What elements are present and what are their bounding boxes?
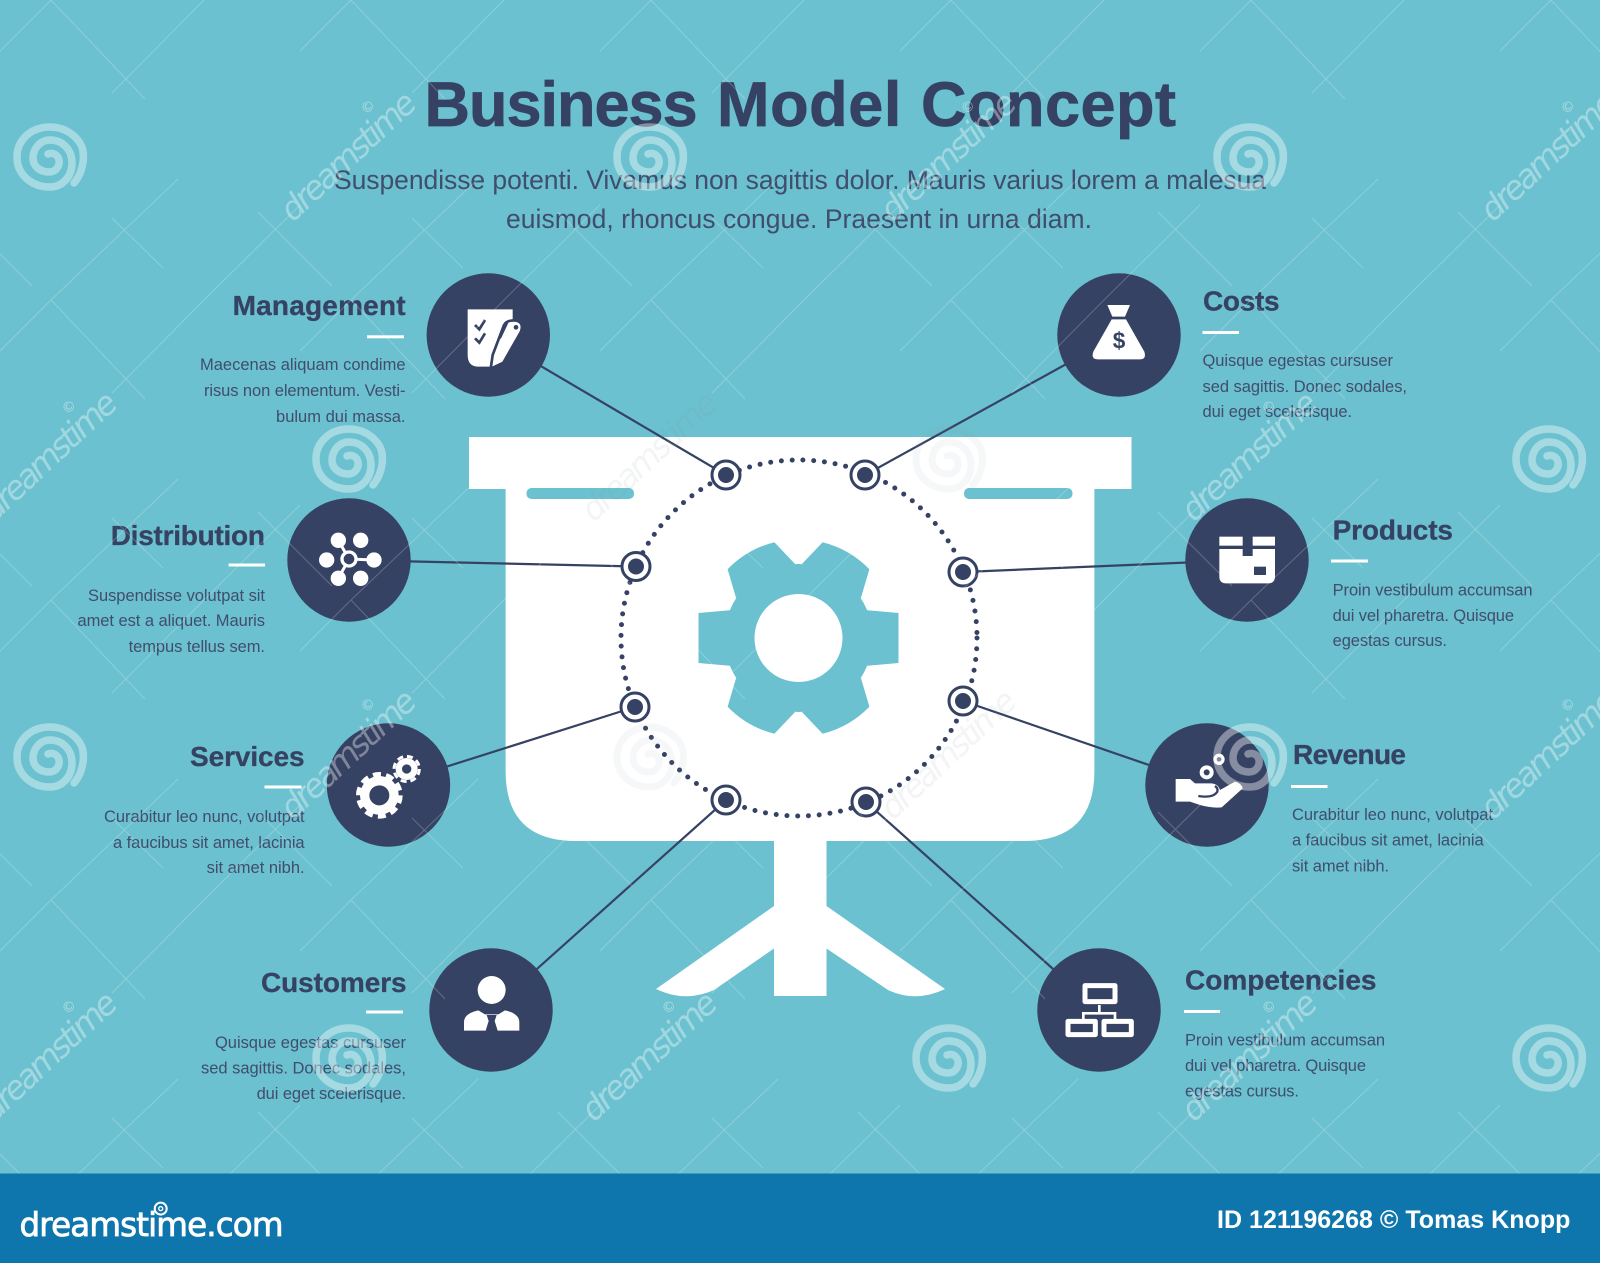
underline [1331,560,1368,562]
icon: customers [429,948,553,1072]
body text [200,356,406,426]
title: Model [717,70,902,140]
body text: Quisque egestas cursuser [215,1034,406,1052]
underline [1184,1010,1220,1013]
watermark overlay: dreamstime [872,83,1024,229]
body text: dui vel pharetra. Quisque [1333,607,1514,625]
heading: Competencies [1185,965,1376,996]
heading: Management [233,290,406,321]
watermark overlay: © [59,997,80,1018]
underline [367,335,404,338]
icon: competencies [1037,948,1161,1072]
body text: a faucibus sit amet, lacinia [113,834,305,852]
icon: revenue [1145,723,1269,847]
body text: risus non elementum. Vesti- [204,382,406,400]
panel: costs [1202,286,1407,421]
body text: Quisque egestas cursuser [1202,352,1394,370]
watermark overlay: dreamstime [573,383,725,529]
body text: Proin vestibulum accumsan [1333,582,1533,600]
watermark overlay: dreamstime [573,983,725,1129]
watermark overlay: © [59,397,80,418]
watermark overlay: © [958,97,979,118]
body text: Curabitur leo nunc, volutpat [104,808,305,826]
board stand [656,838,945,996]
footer logo: dreamstime.com [20,1206,284,1244]
watermark overlay: dreamstime [272,83,424,229]
body text: sit amet nibh. [1292,858,1389,876]
watermark overlay: © [358,695,379,716]
body text [201,1034,406,1103]
board slots [526,488,1072,499]
panel: services [104,741,305,877]
body text: tempus tellus sem. [129,638,265,656]
icon: costs [1057,273,1181,397]
panel: distribution [78,520,265,656]
subtitle [334,165,1266,234]
body text: dui vel pharetra. Quisque [1185,1057,1366,1075]
body text: Proin vestibulum accumsan [1185,1032,1385,1050]
body text [1292,806,1493,876]
watermark overlay: © [1558,97,1579,118]
title: Concept [921,70,1176,140]
watermark overlay: dreamstime [1173,983,1325,1129]
dotted ring [621,460,977,816]
watermark overlay: dreamstime [872,681,1024,827]
connector nodes [621,461,977,816]
icon: costs: $ [1113,328,1126,354]
heading: Customers [261,967,407,998]
body text: sed sagittis. Donec sodales, [201,1060,406,1078]
panel: competencies [1184,965,1385,1100]
body text: Curabitur leo nunc, volutpat [1292,806,1493,824]
central gear [698,535,898,741]
body text [1333,582,1533,650]
body text: a faucibus sit amet, lacinia [1292,832,1485,850]
body text: sit amet nibh. [207,859,305,877]
icon: management [427,273,550,397]
body text: Maecenas aliquam condime [200,356,406,374]
watermark overlay: dreamstime [272,681,424,827]
underline [1202,331,1239,334]
body text [1185,1032,1385,1100]
underline [1291,785,1328,788]
connector lines [349,335,1247,1010]
body text: egestas cursus. [1185,1082,1299,1100]
presentation board [469,437,1132,996]
watermark overlay: © [1259,997,1280,1018]
underline [264,786,302,788]
heading: Distribution [111,520,265,551]
icon: services [327,723,450,847]
body text: egestas cursus. [1333,632,1447,650]
footer credit: ID 121196268 © Tomas Knopp [1217,1206,1570,1234]
body text: amet est a aliquet. Mauris [78,612,265,630]
board top bar [469,437,1132,489]
body text [78,587,265,656]
body text: sed sagittis. Donec sodales, [1202,378,1407,396]
footer bar [0,1174,1600,1263]
heading: Products [1333,514,1453,546]
watermark overlay: © [1259,397,1280,418]
body text: dui eget scelerisque. [257,1085,406,1103]
underline [229,564,265,566]
watermark overlay: © [659,997,680,1018]
body text: Suspendisse volutpat sit [88,587,265,605]
body text [1202,352,1407,421]
title: Business [424,70,697,140]
heading: Costs [1203,286,1280,316]
subtitle: Suspendisse potenti. Vivamus non sagittis dolor. Mauris varius lorem a malesua [334,165,1266,195]
panel: revenue [1291,739,1493,876]
subtitle: euismod, rhoncus congue. Praesent in urna diam. [506,204,1092,234]
watermark overlay: © [358,97,379,118]
heading: Revenue [1293,739,1406,770]
panel: customers [201,967,407,1103]
body text [104,808,305,877]
body text: dui eget scelerisque. [1202,403,1352,421]
body text: bulum dui massa. [276,408,406,426]
underline [366,1010,403,1014]
icon: products [1185,498,1309,622]
board body [506,480,1094,841]
heading: Services [190,741,305,772]
icon: distribution [287,498,411,622]
panel: management [200,290,406,426]
watermark overlay: dreamstime [1173,383,1325,529]
panel: products [1331,514,1533,650]
watermark overlay: © [1558,695,1579,716]
